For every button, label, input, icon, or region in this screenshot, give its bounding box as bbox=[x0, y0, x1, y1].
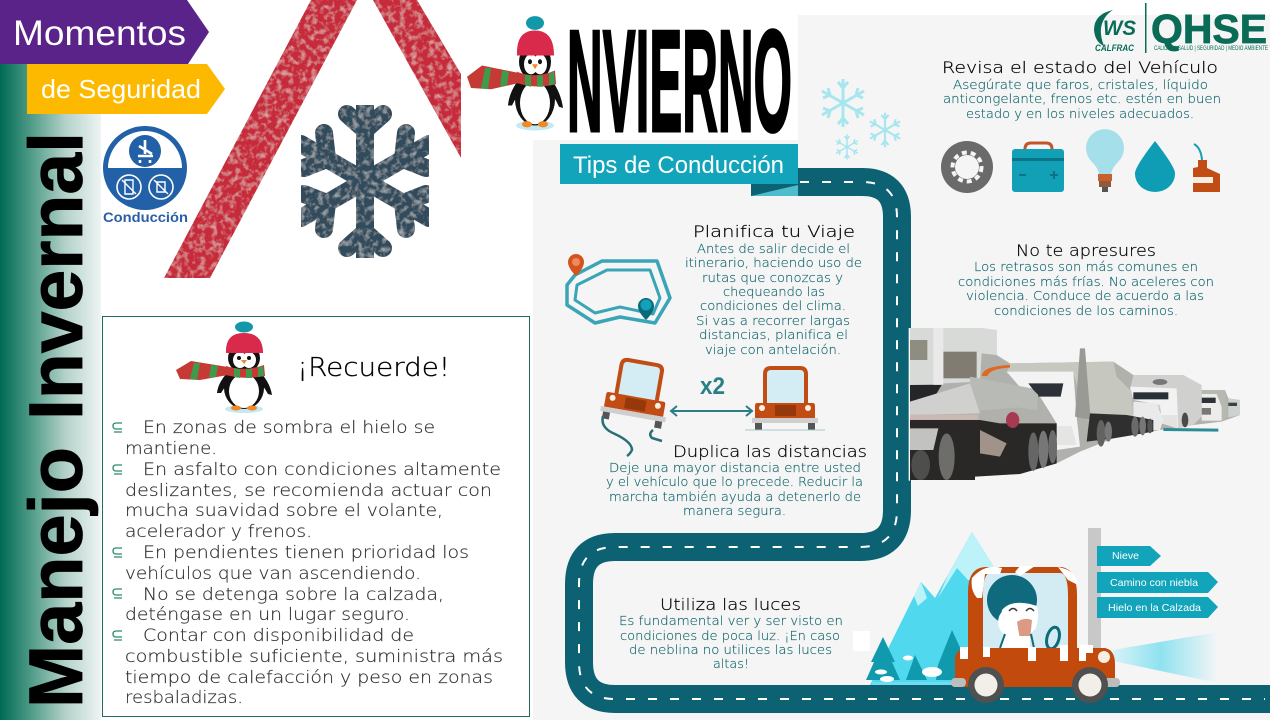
icon: snowflake bbox=[301, 105, 429, 258]
background panel bbox=[533, 15, 1270, 720]
text block: revisa el estado del vehículo bbox=[942, 58, 1221, 121]
text block: planifica tu viaje: rutas que conozcas y bbox=[702, 271, 843, 285]
icon: light bulb bbox=[1086, 129, 1124, 192]
icon: oil bottle bbox=[1193, 144, 1220, 192]
text block: revisa el estado del vehículo: Revisa el estado del Vehículo bbox=[942, 58, 1218, 77]
list text: En pendientes tienen prioridad los bbox=[143, 543, 469, 563]
icon: front car bbox=[745, 368, 825, 430]
list text: combustible suficiente, suministra más bbox=[125, 647, 503, 667]
logo: cws qhse: WS bbox=[1103, 17, 1136, 40]
text block: utiliza las luces bbox=[619, 595, 843, 671]
list text: No se detenga sobre la calzada, bbox=[143, 585, 444, 605]
text block: planifica tu viaje: Planifica tu Viaje bbox=[693, 222, 855, 241]
list text: Contar con disponibilidad de bbox=[143, 626, 414, 646]
text block: revisa el estado del vehículo: anticongelante, frenos etc. estén en buen bbox=[943, 92, 1221, 106]
icon: skidding car bbox=[599, 357, 675, 456]
text block: planifica tu viaje: itinerario, haciendo uso de bbox=[685, 256, 862, 270]
icon: snowflakes bbox=[822, 79, 900, 159]
text block: planifica tu viaje: viaje con antelación. bbox=[705, 343, 841, 357]
text block: utiliza las luces: condiciones de poca luz. ¡En caso bbox=[620, 629, 840, 643]
text block: utiliza las luces: de neblina no utilices las luces bbox=[629, 643, 832, 657]
text block: planifica tu viaje: Antes de salir decide el bbox=[697, 242, 850, 256]
warning triangle bbox=[164, 0, 461, 278]
signpost pole bbox=[1088, 528, 1101, 653]
heading: recuerde: ¡Recuerde! bbox=[297, 353, 450, 383]
icon: water drop bbox=[1135, 141, 1175, 192]
yellow banner: de Seguridad bbox=[41, 74, 201, 104]
text block: planifica tu viaje: distancias, planifica el bbox=[699, 328, 848, 342]
vertical title: Invernal bbox=[14, 132, 99, 420]
text block: duplica las distancias bbox=[606, 442, 867, 518]
icon: tire bbox=[941, 141, 993, 193]
text block: utiliza las luces: Es fundamental ver y ser visto en bbox=[619, 614, 843, 628]
text: NVIERNO bbox=[567, 0, 792, 162]
text block: no te apresures: condiciones de los caminos. bbox=[994, 304, 1178, 318]
icon: penguin top bbox=[467, 16, 563, 130]
list text: mantiene. bbox=[125, 439, 217, 459]
text block: duplica las distancias: Deje una mayor distancia entre usted bbox=[609, 461, 861, 475]
sign: nieve: Nieve bbox=[1112, 550, 1139, 562]
icon: battery bbox=[1012, 143, 1064, 192]
list text: mucha suavidad sobre el volante, bbox=[125, 501, 443, 521]
list text: tiempo de calefacción y peso en zonas bbox=[125, 668, 493, 688]
headlight beam bbox=[1113, 632, 1218, 683]
text block: utiliza las luces: Utiliza las luces bbox=[660, 595, 801, 614]
white patch bbox=[853, 631, 870, 651]
vertical title: Manejo bbox=[14, 447, 99, 708]
text block: revisa el estado del vehículo: estado y en los niveles adecuados. bbox=[966, 107, 1194, 121]
icon: driving rule badge bbox=[103, 126, 188, 225]
list text: vehículos que van ascendiendo. bbox=[125, 564, 421, 584]
left green gradient band bbox=[0, 60, 101, 720]
list text: acelerador y frenos. bbox=[125, 522, 312, 542]
text block: planifica tu viaje: chequeando las bbox=[723, 285, 825, 299]
list text: deténgase en un lugar seguro. bbox=[125, 605, 410, 625]
illustration: mountains and trees bbox=[866, 532, 1020, 685]
text block: planifica tu viaje bbox=[685, 222, 862, 357]
arrow: double distance: x2 bbox=[700, 373, 725, 400]
list text: deslizantes, se recomienda actuar con bbox=[125, 481, 492, 501]
bullets bbox=[113, 423, 122, 640]
illustration: penguin driving car bbox=[951, 566, 1120, 703]
purple banner: Momentos bbox=[13, 14, 186, 53]
logo: cws qhse: CALFRAC bbox=[1095, 43, 1134, 53]
text block: no te apresures: Los retrasos son más comunes en bbox=[974, 260, 1198, 274]
sign: nieve bbox=[1097, 546, 1161, 566]
road bbox=[579, 182, 1270, 699]
sign: hielo en la calzada: Hielo en la Calzada bbox=[1108, 602, 1201, 614]
text block: duplica las distancias: manera segura. bbox=[683, 504, 786, 518]
white header backing bbox=[533, 0, 798, 140]
icon: driving rule badge: Conducción bbox=[103, 209, 188, 225]
text block: planifica tu viaje: condiciones del clima. bbox=[700, 299, 846, 313]
text block: utiliza las luces: altas! bbox=[713, 657, 749, 671]
photo: line of trucks bbox=[909, 328, 1240, 481]
yellow banner bbox=[27, 64, 225, 114]
text block: duplica las distancias: marcha también ayuda a detenerlo de bbox=[609, 490, 861, 504]
text block: planifica tu viaje: Si vas a recorrer largas bbox=[696, 314, 850, 328]
purple banner bbox=[0, 0, 209, 64]
sign: hielo en la calzada bbox=[1097, 597, 1218, 618]
sign: camino con niebla bbox=[1097, 572, 1218, 593]
arrow: double distance bbox=[671, 373, 752, 416]
icon: penguin bbox=[176, 322, 272, 413]
list text bbox=[125, 418, 503, 708]
text block: duplica las distancias: Duplica las distancias bbox=[673, 442, 867, 461]
text block: no te apresures bbox=[958, 241, 1214, 318]
panel: recuerde bbox=[102, 316, 530, 716]
sign: camino con niebla: Camino con niebla bbox=[1110, 577, 1198, 589]
list text: En zonas de sombra el hielo se bbox=[143, 418, 435, 438]
text block: no te apresures: No te apresures bbox=[1016, 241, 1156, 260]
icon: route map bbox=[567, 254, 670, 323]
text block: duplica las distancias: y el vehículo que lo precede. Reducir la bbox=[606, 475, 863, 489]
text block: no te apresures: violencia. Conduce de acuerdo a las bbox=[966, 289, 1204, 303]
logo: cws qhse: QHSE bbox=[1151, 6, 1267, 52]
tips banner bbox=[560, 144, 798, 184]
list text: En asfalto con condiciones altamente bbox=[143, 460, 501, 480]
vertical title bbox=[14, 132, 99, 708]
list text: resbaladizas. bbox=[125, 688, 243, 708]
text block: no te apresures: condiciones más frías. No aceleres con bbox=[958, 275, 1214, 289]
tips banner: Tips de Conducción bbox=[573, 152, 784, 179]
logo: cws qhse bbox=[1094, 3, 1268, 53]
text block: revisa el estado del vehículo: Asegúrate que faros, cristales, líquido bbox=[953, 78, 1208, 92]
